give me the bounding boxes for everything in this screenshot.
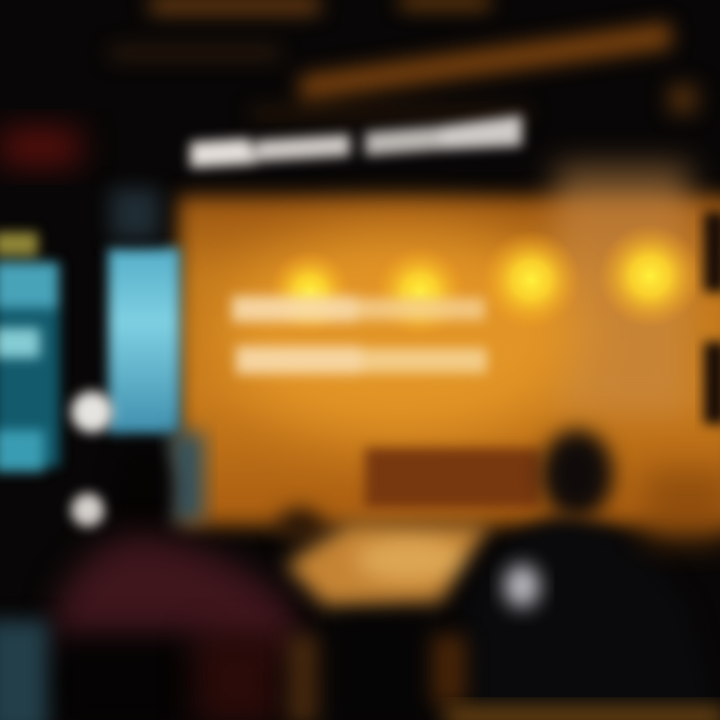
dark red left glow — [0, 128, 80, 166]
bottom right warm floor — [445, 706, 720, 720]
right edge warm shade — [645, 470, 720, 540]
white detail on shirt — [504, 564, 540, 608]
table with warm light — [278, 508, 490, 606]
wall sign: blurred illegible text lines — [232, 296, 487, 374]
sign: blurred illegible heading — [190, 115, 522, 168]
white light spots — [71, 391, 113, 527]
back wall: orange — [178, 165, 720, 526]
left screen panel — [0, 232, 60, 472]
wall pillar highlight right — [555, 165, 690, 415]
bottom left teal floor — [0, 620, 48, 720]
ceiling lights row — [268, 224, 702, 338]
person: right silhouette — [465, 430, 720, 720]
ceiling beams — [110, 0, 698, 118]
wall warm centre — [220, 230, 580, 440]
foreground dark table legs — [288, 620, 466, 720]
right wall dark frames — [704, 212, 720, 424]
person: left silhouette — [50, 446, 295, 720]
dark brown wall panel — [365, 448, 540, 508]
tall cyan screen panel — [108, 188, 204, 522]
